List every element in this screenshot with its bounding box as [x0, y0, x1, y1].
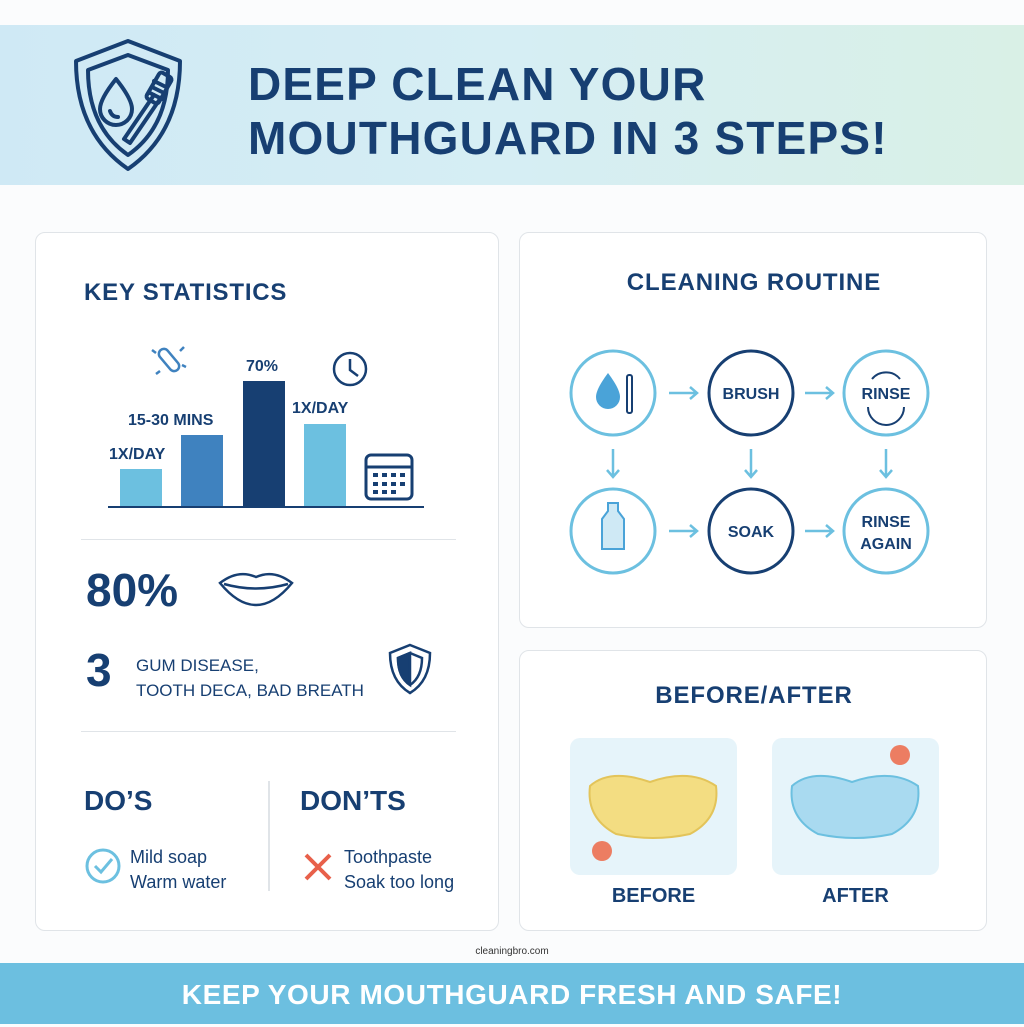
don'ts column: Toothpaste: [344, 847, 432, 867]
icon: shield with drop and toothbrush: [74, 39, 182, 171]
stat: 3 risks: 3: [86, 644, 112, 696]
bar chart: 15-30 MINS: [128, 412, 214, 429]
bar chart: 1X/DAY: [109, 446, 166, 463]
image: before mouthguard: [570, 738, 737, 875]
don'ts column: DON’TS: [300, 785, 406, 816]
flow diagram: SOAK: [728, 524, 775, 541]
header band: [0, 25, 1024, 185]
bar chart: 70%: [246, 358, 278, 375]
title: MOUTHGUARD IN 3 STEPS!: [248, 112, 888, 164]
stat: 3 risks: [86, 644, 432, 700]
do's column: [84, 785, 226, 892]
don'ts column: Soak too long: [344, 872, 454, 892]
image: after mouthguard: [772, 738, 939, 875]
panel: key statistics: [35, 232, 499, 931]
footer banner: KEEP YOUR MOUTHGUARD FRESH AND SAFE!: [182, 979, 842, 1010]
footer banner: [0, 963, 1024, 1024]
panel: before/after: [519, 650, 987, 931]
heading: cleaning routine: CLEANING ROUTINE: [627, 269, 881, 296]
label: after: AFTER: [822, 885, 889, 907]
bar chart: [108, 346, 424, 508]
icon: shield: [388, 644, 432, 694]
title: [248, 58, 888, 164]
do's column: Warm water: [130, 872, 226, 892]
do's column: DO’S: [84, 785, 152, 816]
stat: 80%: [86, 564, 294, 616]
don'ts column: [300, 785, 454, 892]
label: before: BEFORE: [612, 885, 695, 907]
flow diagram: [570, 350, 930, 574]
stat: 3 risks: GUM DISEASE,: [136, 656, 259, 675]
flow diagram: RINSE: [862, 514, 911, 531]
source credit: cleaningbro.com: [475, 946, 549, 957]
bar chart: 1X/DAY: [292, 400, 349, 417]
flow diagram: BRUSH: [723, 386, 779, 403]
flow diagram: RINSE: [862, 386, 911, 403]
heading: before/after: BEFORE/AFTER: [655, 682, 853, 709]
title: DEEP CLEAN YOUR: [248, 58, 707, 110]
heading: key statistics: KEY STATISTICS: [84, 279, 287, 306]
panel: cleaning routine: [519, 232, 987, 628]
stat: 80%: 80%: [86, 564, 178, 616]
do's column: Mild soap: [130, 847, 207, 867]
stat: 3 risks: TOOTH DECA, BAD BREATH: [136, 681, 364, 700]
icon: lips: [218, 572, 294, 606]
flow diagram: AGAIN: [860, 536, 912, 553]
